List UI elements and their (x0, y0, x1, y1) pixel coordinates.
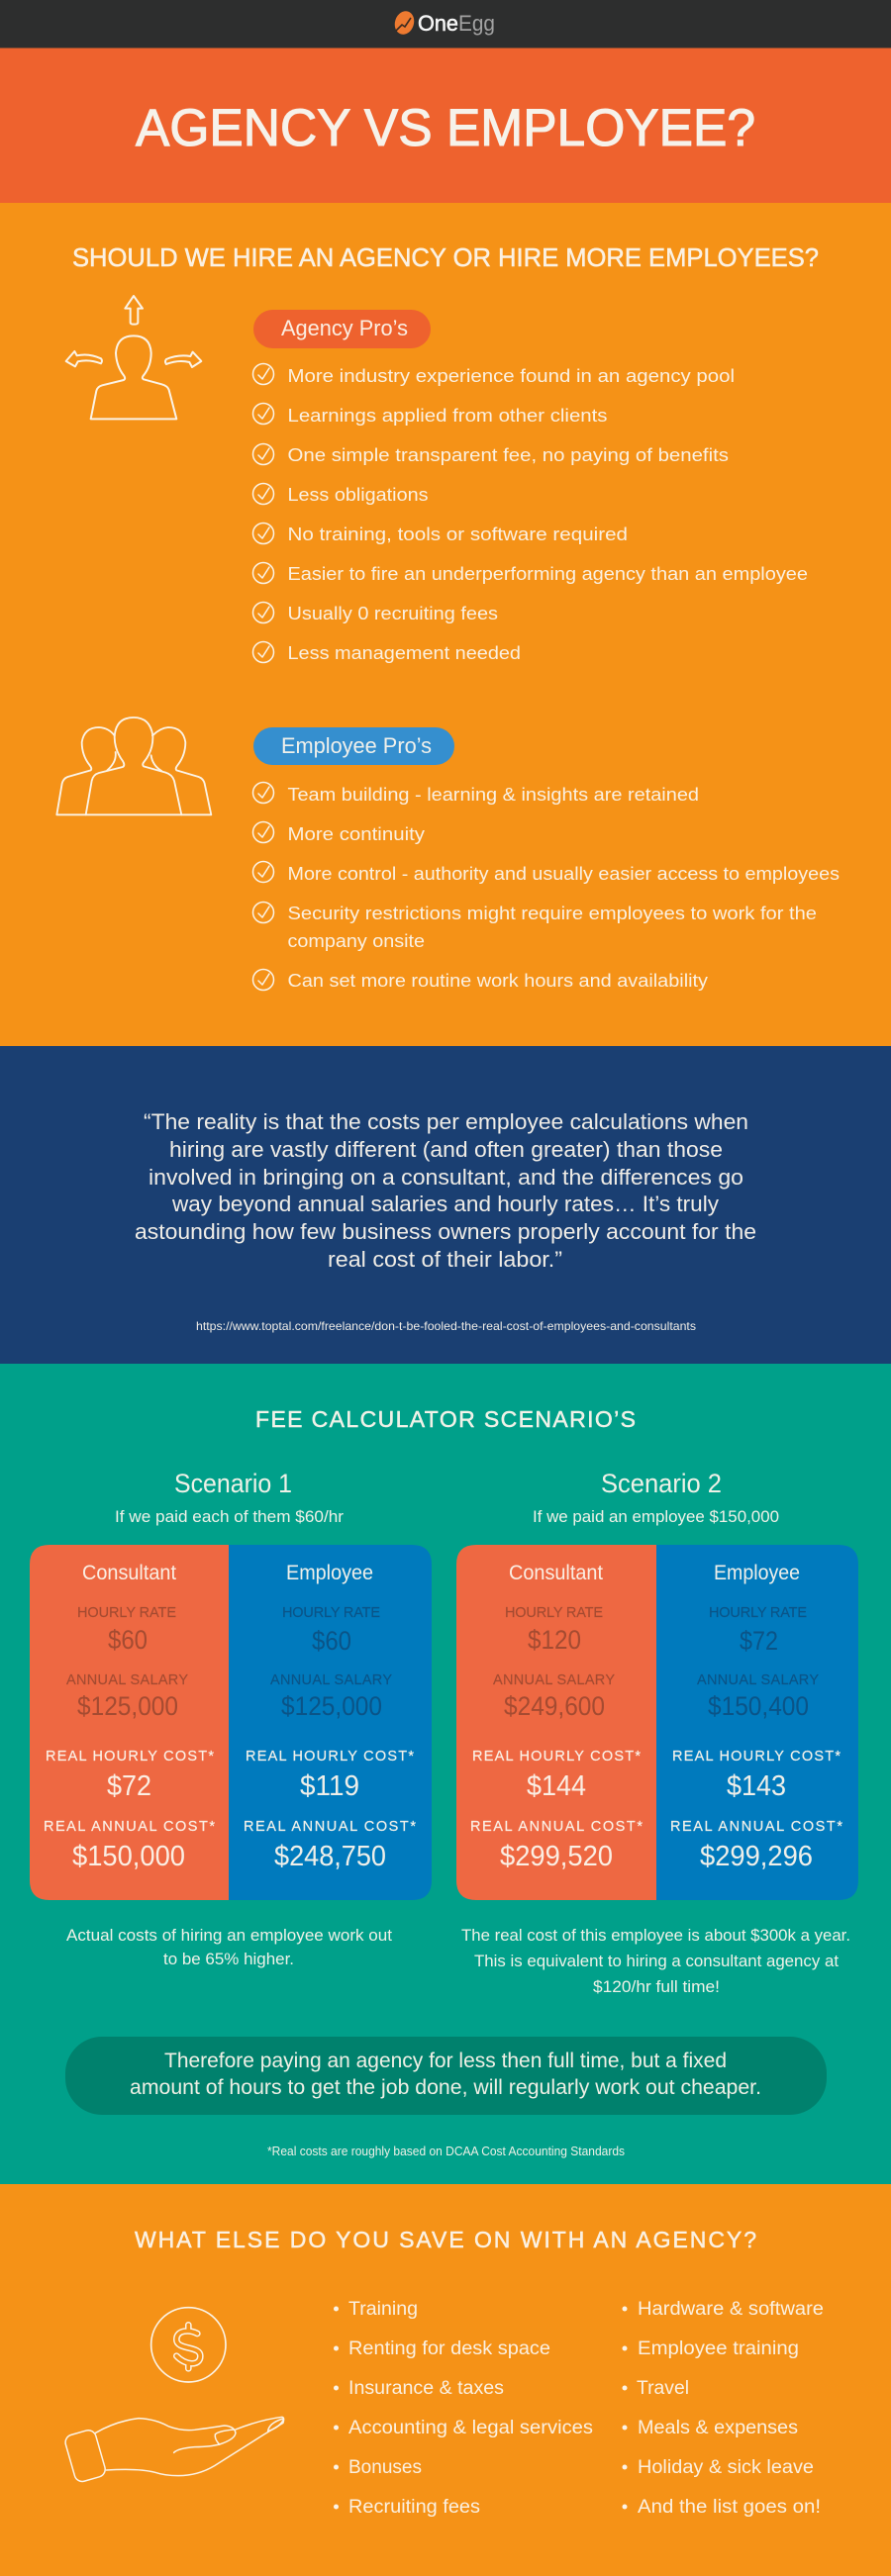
item: Less management needed (287, 642, 521, 663)
consultant column: $125,000 (77, 1691, 178, 1721)
employee column: $125,000 (281, 1691, 382, 1721)
quote text: hiring are vastly different (and often greater) than those (169, 1137, 723, 1162)
scenario 2 note: $120/hr full time! (593, 1977, 720, 1996)
quote text (135, 1109, 756, 1272)
scenario 1 note: to be 65% higher. (163, 1950, 294, 1968)
source url: https://www.toptal.com/freelance/don-t-be-fooled-the-real-cost-of-employees-and-consultants (196, 1319, 696, 1333)
panel: fee calculator (0, 1364, 891, 2184)
list: savings column 1: Renting for desk space (348, 2338, 550, 2359)
panel: what else you save (0, 2184, 891, 2576)
consultant column (470, 1562, 643, 1872)
logo: OneEgg (392, 9, 495, 37)
heading: should we hire: SHOULD WE HIRE AN AGENCY OR HIRE MORE EMPLOYEES? (72, 244, 819, 272)
quote text: astounding how few business owners properly account for the (135, 1219, 756, 1244)
consultant column: ANNUAL SALARY (66, 1672, 188, 1688)
item: Usually 0 recruiting fees (287, 603, 498, 623)
callout: conclusion: Therefore paying an agency for less then full time, but a fixed (164, 2049, 727, 2072)
scenario 1 note (66, 1926, 392, 1968)
scenario 2 note (461, 1926, 850, 1996)
consultant column: Consultant (509, 1562, 603, 1584)
quote text: involved in bringing on a consultant, and the differences go (148, 1165, 743, 1190)
consultant column: REAL ANNUAL COST* (470, 1819, 643, 1835)
logo: OneEgg: One (418, 11, 458, 36)
pill: Employee Pro's (253, 727, 454, 765)
list: savings column 1: Bonuses (348, 2457, 422, 2478)
callout: conclusion (65, 2037, 827, 2115)
employee column (670, 1562, 842, 1872)
scenario 2 heading: If we paid an employee $150,000 (533, 1507, 779, 1526)
consultant column: REAL HOURLY COST* (472, 1749, 641, 1765)
scenario 1 heading (115, 1469, 344, 1526)
list: savings column 2 (622, 2299, 824, 2518)
list: savings column 2: And the list goes on! (638, 2497, 821, 2518)
item: Easier to fire an underperforming agency than an employee (287, 563, 808, 584)
employee column: $60 (312, 1626, 351, 1656)
employee column: Employee (714, 1562, 800, 1584)
consultant column: $120 (528, 1625, 581, 1655)
pill: Agency Pro's (253, 310, 431, 348)
item (253, 821, 426, 844)
consultant column: HOURLY RATE (77, 1605, 176, 1621)
item: Can set more routine work hours and availability (287, 970, 709, 991)
item: More continuity (287, 823, 426, 844)
employee column: REAL HOURLY COST* (246, 1749, 414, 1765)
quote text: real cost of their labor.” (328, 1247, 562, 1272)
employee column: ANNUAL SALARY (697, 1672, 819, 1688)
panel: quote (0, 1046, 891, 1364)
scenario 2 heading (533, 1469, 779, 1526)
list: savings column 2: Holiday & sick leave (638, 2457, 814, 2478)
item: More industry experience found in an agency pool (287, 365, 735, 386)
list: savings column 2: Hardware & software (638, 2299, 824, 2320)
quote text: way beyond annual salaries and hourly rates… It’s truly (171, 1192, 719, 1216)
employee column: $299,296 (700, 1841, 813, 1872)
list: savings column 1 (334, 2299, 593, 2518)
list: savings column 1: Accounting & legal services (348, 2418, 593, 2438)
pill: Agency Pro's: Agency Pro’s (281, 316, 408, 340)
list: savings column 2: Meals & expenses (638, 2418, 798, 2438)
pill: Employee Pro's: Employee Pro’s (281, 733, 432, 758)
employee column: Employee (286, 1562, 373, 1584)
consultant column: $72 (107, 1770, 151, 1802)
consultant column: HOURLY RATE (505, 1605, 603, 1621)
consultant column: $144 (527, 1770, 586, 1802)
list: savings column 1: Insurance & taxes (348, 2378, 504, 2399)
logo: OneEgg: Egg (458, 11, 495, 36)
item: One simple transparent fee, no paying of benefits (287, 444, 729, 465)
list: savings column 2: Travel (637, 2378, 689, 2399)
consultant column: $299,520 (500, 1841, 613, 1872)
footnote: *Real costs are roughly based on DCAA Cost Accounting Standards (267, 2144, 625, 2158)
scenario 2 note: The real cost of this employee is about $300k a year. (461, 1926, 850, 1945)
item: Team building - learning & insights are retained (287, 784, 699, 805)
employee column: $248,750 (274, 1841, 386, 1872)
item: More control - authority and usually easier access to employees (287, 863, 840, 884)
employee column: $143 (727, 1770, 786, 1802)
scenario 1 heading: Scenario 1 (174, 1469, 292, 1498)
list: employee pros (253, 782, 840, 991)
employee column: $119 (300, 1770, 359, 1802)
scenario 1 heading: If we paid each of them $60/hr (115, 1507, 344, 1526)
employee column (244, 1562, 416, 1872)
callout: conclusion: amount of hours to get the job done, will regularly work out cheaper. (130, 2075, 761, 2099)
consultant column: $60 (108, 1625, 148, 1655)
employee column: REAL ANNUAL COST* (670, 1819, 842, 1835)
consultant column: $249,600 (504, 1691, 605, 1721)
heading: fee calculator: FEE CALCULATOR SCENARIO’S (255, 1406, 636, 1432)
consultant column (44, 1562, 215, 1872)
consultant column: REAL ANNUAL COST* (44, 1819, 215, 1835)
list: savings column 2: Employee training (638, 2338, 799, 2359)
consultant column: Consultant (82, 1562, 176, 1584)
scenario 1 note: Actual costs of hiring an employee work out (66, 1926, 392, 1945)
header bar with logo (0, 0, 891, 48)
list: agency pros (253, 364, 808, 663)
item: No training, tools or software required (287, 524, 628, 544)
quote text: “The reality is that the costs per employee calculations when (144, 1109, 748, 1134)
scenario 2 table (456, 1545, 858, 1900)
employee column: HOURLY RATE (282, 1605, 380, 1621)
scenario 2 note: This is equivalent to hiring a consultant agency at (474, 1952, 839, 1970)
item: Less obligations (287, 484, 428, 505)
item: Learnings applied from other clients (287, 405, 608, 426)
scenario 2 heading: Scenario 2 (601, 1469, 722, 1498)
item (253, 903, 817, 951)
employee column: $72 (740, 1626, 778, 1656)
employee column: REAL ANNUAL COST* (244, 1819, 416, 1835)
consultant column: ANNUAL SALARY (493, 1672, 615, 1688)
icon: person with arrows (66, 296, 201, 419)
consultant column: REAL HOURLY COST* (46, 1749, 214, 1765)
icon: team of three (56, 717, 211, 814)
scenario 1 table (30, 1545, 432, 1900)
list: savings column 1: Training (348, 2299, 418, 2320)
icon: hand with dollar coin (63, 2308, 284, 2483)
item: Security restrictions might require employees to work for the (287, 903, 817, 923)
employee column: ANNUAL SALARY (270, 1672, 392, 1688)
title banner (0, 48, 891, 203)
employee column: HOURLY RATE (709, 1605, 807, 1621)
list: savings column 1: Recruiting fees (348, 2497, 480, 2518)
employee column: $150,400 (708, 1691, 809, 1721)
panel: pros (0, 203, 891, 1046)
consultant column: $150,000 (72, 1841, 185, 1872)
item: company onsite (287, 930, 425, 951)
heading: what else: WHAT ELSE DO YOU SAVE ON WITH AN AGENCY? (135, 2227, 756, 2252)
title: AGENCY VS EMPLOYEE? (136, 99, 755, 157)
employee column: REAL HOURLY COST* (672, 1749, 841, 1765)
